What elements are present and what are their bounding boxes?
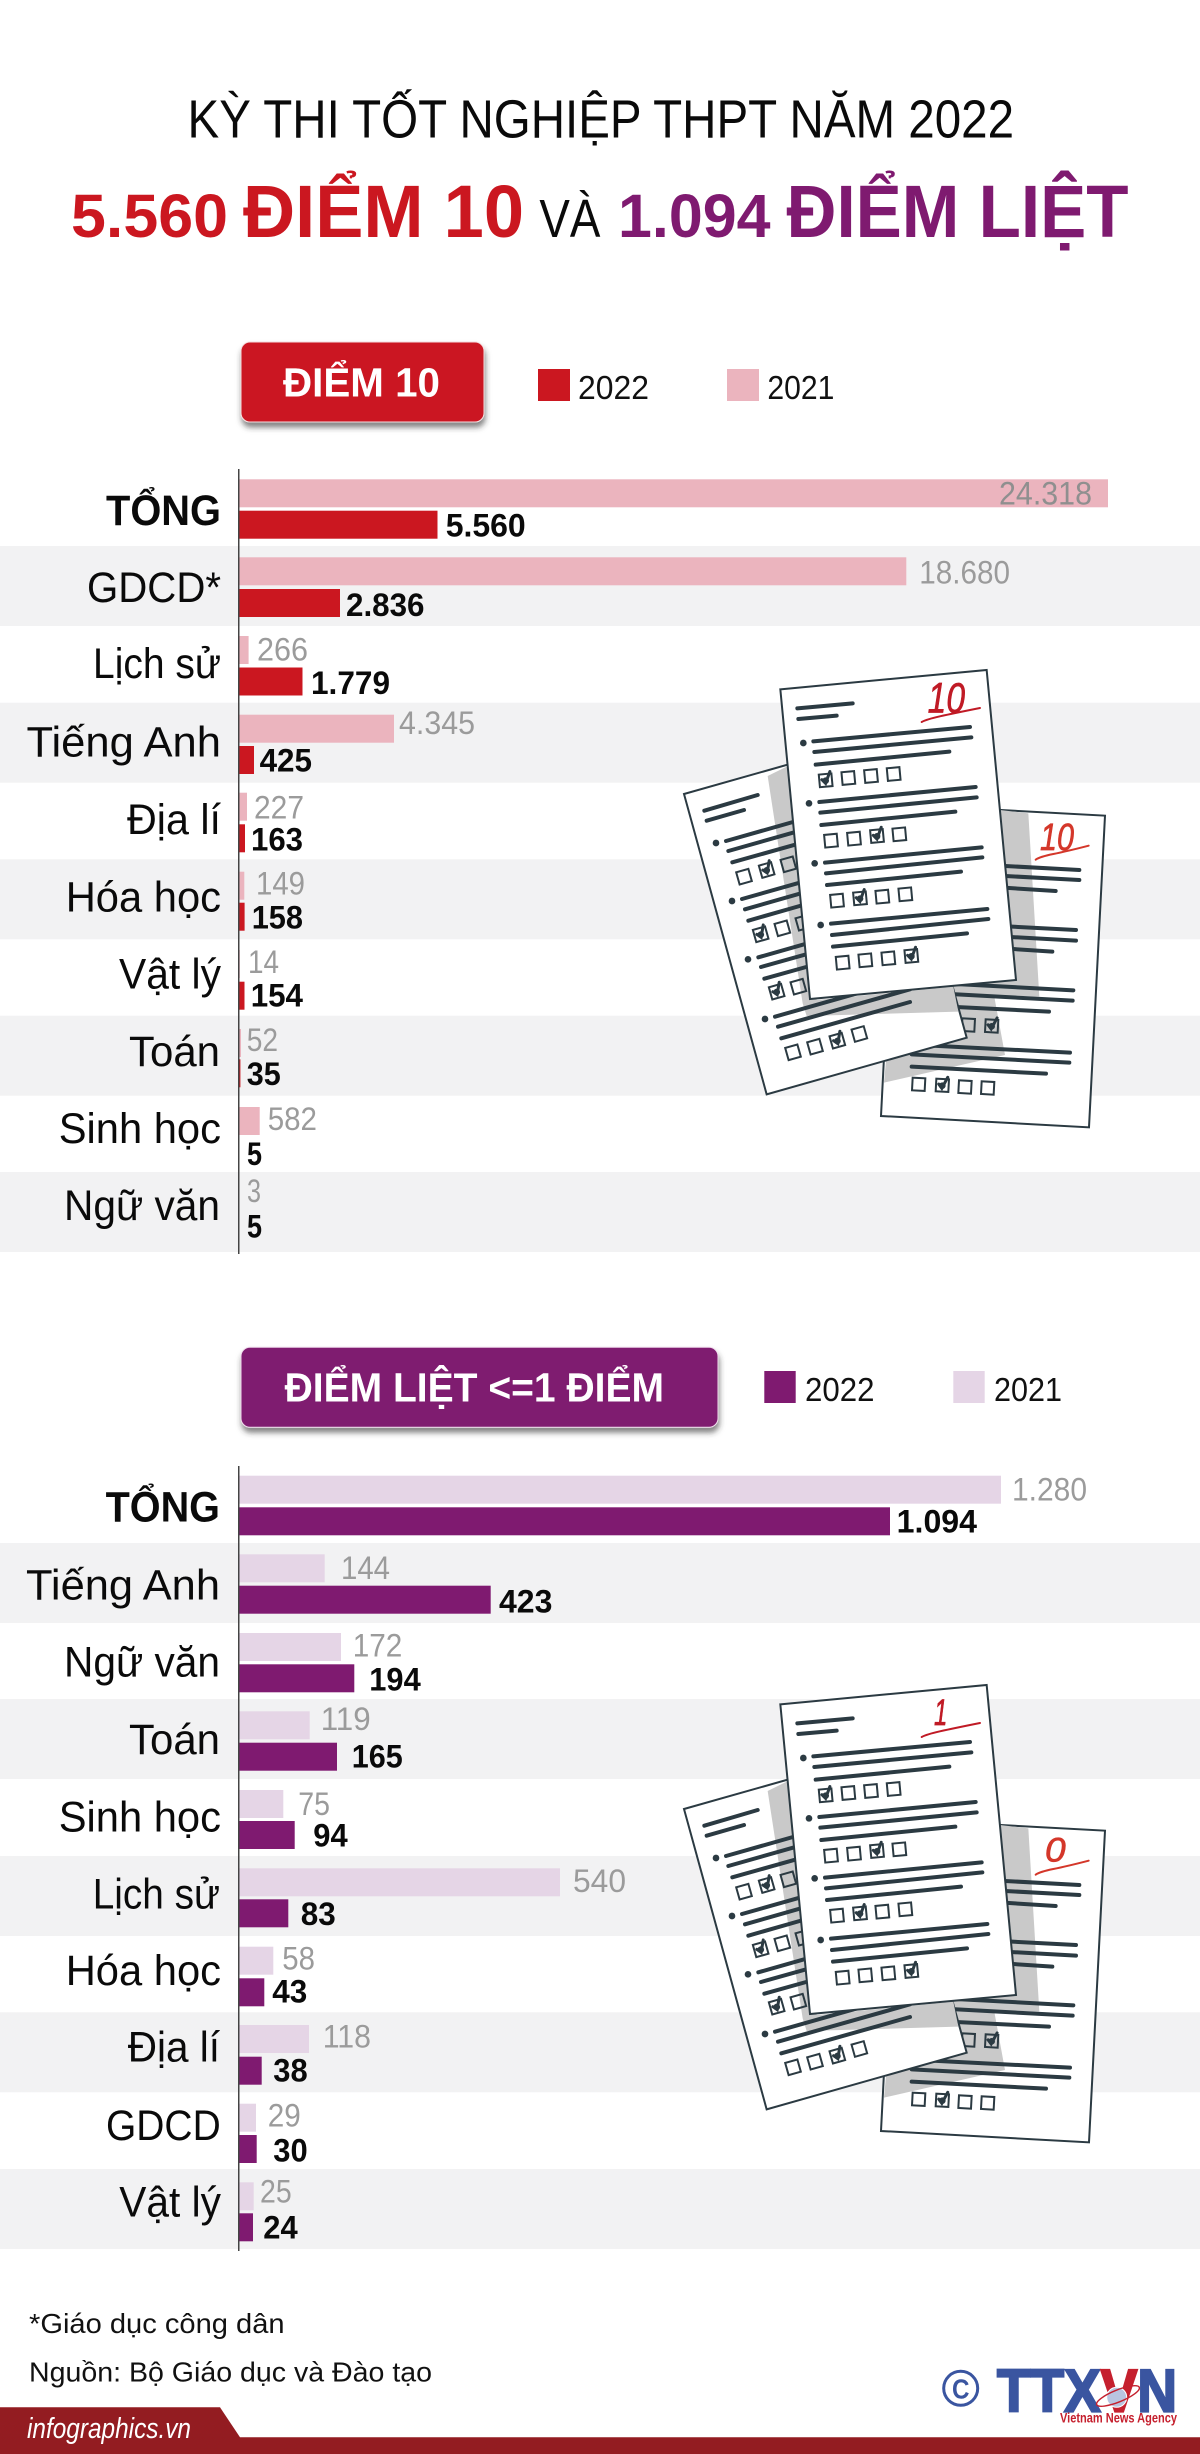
row: Hóa học: Hóa học	[66, 1947, 221, 1995]
row: Ngữ văn: 172	[353, 1628, 402, 1664]
row: Địa lí: 163	[251, 822, 303, 858]
row: Toán: Toán	[129, 1028, 220, 1076]
icon: exam papers scored 1 and 0	[684, 1685, 1105, 2142]
icon: exam papers scored 10: 10	[1040, 817, 1074, 859]
row: Hóa học	[66, 865, 305, 935]
section heading: ĐIỂM LIỆT	[241, 1347, 718, 1427]
legend: điểm liệt	[764, 1371, 1062, 1408]
row: Địa lí	[128, 2018, 371, 2089]
row: Lịch sử	[93, 1863, 626, 1932]
row: Lịch sử: 83	[301, 1896, 336, 1932]
row: GDCD	[106, 2098, 308, 2169]
section heading: ĐIỂM 10: ĐIỂM 10	[283, 359, 440, 406]
title	[71, 89, 1128, 253]
row: Tiếng Anh	[26, 705, 475, 779]
row: Lịch sử: 266	[257, 632, 308, 668]
row: Toán: 165	[352, 1739, 403, 1775]
row: Lịch sử: Lịch sử	[93, 640, 221, 688]
row: Địa lí: Địa lí	[128, 2024, 220, 2072]
row: GDCD*	[87, 554, 1010, 623]
row: GDCD*: 2.836	[346, 587, 424, 623]
row: Sinh học: Sinh học	[59, 1105, 221, 1153]
legend: điểm liệt: 2021	[994, 1371, 1062, 1408]
row: TỔNG	[106, 1472, 1087, 1540]
row: Địa lí: Địa lí	[127, 796, 221, 844]
row: Sinh học	[59, 1101, 317, 1172]
row: Vật lý	[119, 2174, 298, 2245]
row: Toán	[129, 1022, 281, 1092]
row: Toán: Toán	[129, 1716, 220, 1764]
row: Hóa học: 43	[272, 1974, 307, 2010]
row: Tiếng Anh: 4.345	[399, 705, 475, 741]
logo: TTXVN: TTXVN	[997, 2358, 1177, 2425]
legend: điểm 10: 2022	[578, 369, 649, 406]
row: Lịch sử	[93, 632, 390, 701]
row: Hóa học	[66, 1940, 315, 2010]
row: Toán: 52	[247, 1022, 278, 1058]
section heading: ĐIỂM 10	[241, 342, 484, 422]
row: Tiếng Anh: Tiếng Anh	[26, 719, 221, 767]
row: Vật lý: 14	[248, 944, 279, 980]
row: Tiếng Anh: Tiếng Anh	[26, 1561, 220, 1609]
row: Ngữ văn: Ngữ văn	[64, 1639, 220, 1687]
row: Sinh học: 582	[268, 1101, 317, 1137]
row: Lịch sử: 1.779	[311, 665, 390, 701]
row: Tiếng Anh	[26, 1550, 552, 1620]
row: Sinh học: Sinh học	[59, 1794, 221, 1842]
row: Sinh học: 75	[298, 1786, 330, 1822]
title figure: 5.560: 5.560	[71, 182, 228, 250]
row: Vật lý: 154	[251, 978, 303, 1014]
row: Sinh học	[59, 1786, 348, 1854]
title: VÀ: VÀ	[539, 189, 600, 249]
row: Toán: 35	[247, 1056, 281, 1092]
row: GDCD: GDCD	[106, 2102, 221, 2150]
row: GDCD*: GDCD*	[87, 564, 221, 612]
footnote: *Giáo dục công dân	[29, 2308, 285, 2339]
row: TỔNG: 1.280	[1012, 1472, 1087, 1508]
row: TỔNG	[106, 475, 1108, 544]
row: Hóa học: 149	[256, 865, 305, 901]
footer band	[0, 2407, 1200, 2454]
source: Nguồn: Bộ Giáo dục và Đào tạo	[29, 2357, 432, 2388]
row: TỔNG: 5.560	[446, 508, 526, 544]
row: Ngữ văn: 5	[247, 1209, 262, 1245]
row: Ngữ văn: 3	[247, 1173, 261, 1209]
row: Vật lý: Vật lý	[119, 950, 221, 998]
legend: điểm liệt: 2022	[805, 1371, 874, 1408]
footer site name: infographics.vn	[27, 2413, 191, 2445]
title figure: 1.094: 1.094	[618, 182, 771, 250]
bar chart: điểm liệt	[26, 1472, 1087, 2245]
row: TỔNG: TỔNG	[106, 485, 221, 535]
row: GDCD: 30	[273, 2133, 308, 2169]
row: Sinh học: 94	[313, 1818, 348, 1854]
row: GDCD: 29	[268, 2098, 301, 2134]
row: Hóa học: Hóa học	[66, 874, 221, 922]
icon: exam papers scored 1 and 0: 1	[934, 1691, 947, 1733]
row: Toán	[129, 1701, 403, 1775]
icon: exam papers scored 10	[684, 670, 1105, 1127]
legend: điểm 10: 2021	[767, 369, 834, 406]
icon: exam papers scored 1 and 0: 0	[1045, 1832, 1066, 1870]
row: Hóa học: 158	[252, 899, 303, 935]
row: Lịch sử: Lịch sử	[93, 1870, 220, 1918]
row: TỔNG: 1.094	[897, 1504, 977, 1540]
row: Toán: 119	[321, 1701, 371, 1737]
row: Ngữ văn	[64, 1173, 262, 1245]
row: Địa lí: 38	[273, 2053, 308, 2089]
legend: điểm 10	[538, 369, 834, 406]
row: Địa lí: 118	[323, 2018, 371, 2054]
row: Lịch sử: 540	[573, 1863, 626, 1899]
row: Địa lí: 227	[254, 790, 304, 826]
title: ĐIỂM 10: ĐIỂM 10	[243, 170, 524, 253]
row: Ngữ văn: Ngữ văn	[64, 1182, 220, 1230]
row: Vật lý: 25	[260, 2174, 292, 2210]
section heading: ĐIỂM LIỆT: ĐIỂM LIỆT <=1 ĐIỂM	[285, 1364, 664, 1411]
row: Hóa học: 58	[282, 1940, 315, 1976]
row: Vật lý: 24	[263, 2209, 298, 2245]
bar chart: điểm 10	[26, 475, 1108, 1245]
row: Sinh học: 5	[247, 1136, 262, 1172]
logo: TTXVN: C	[952, 2374, 970, 2404]
icon: exam papers scored 10: 10	[928, 674, 965, 722]
title line 1: KỲ THI TỐT NGHIỆP THPT NĂM 2022	[188, 89, 1014, 149]
row: GDCD*: 18.680	[919, 554, 1010, 590]
row: Vật lý: Vật lý	[119, 2179, 221, 2227]
row: TỔNG: TỔNG	[106, 1482, 220, 1532]
row: Tiếng Anh: 423	[499, 1584, 552, 1620]
row: Ngữ văn	[64, 1628, 421, 1698]
row: Ngữ văn: 194	[369, 1662, 421, 1698]
row: Tiếng Anh: 144	[341, 1550, 390, 1586]
row: Địa lí	[127, 790, 304, 858]
title: ĐIỂM LIỆT: ĐIỂM LIỆT	[786, 170, 1128, 253]
row: TỔNG: 24.318	[999, 475, 1092, 511]
row: Tiếng Anh: 425	[260, 743, 312, 779]
row: Vật lý	[119, 944, 303, 1014]
